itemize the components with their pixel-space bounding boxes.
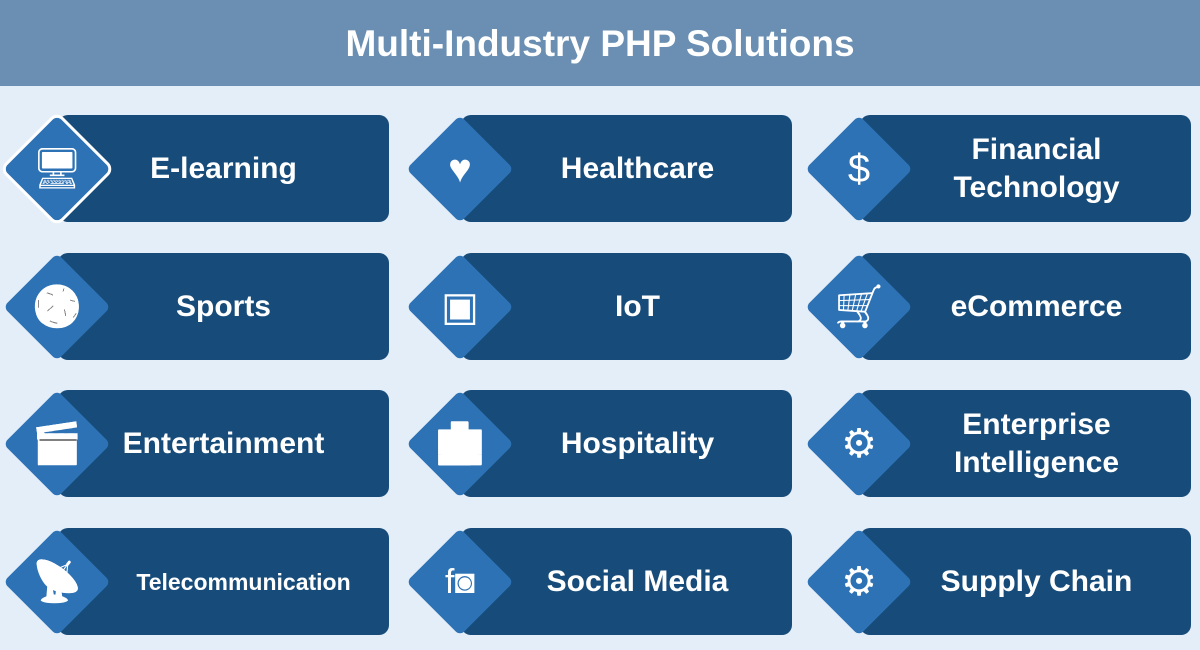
panel: Healthcare	[408, 115, 792, 222]
panel: Supply Chain: Supply Chain	[941, 564, 1132, 598]
panel: Telecommunication: Telecommunication	[136, 568, 351, 594]
panel: Hospitality: Hospitality	[561, 426, 714, 460]
panel: Entertainment: Entertainment	[123, 426, 324, 460]
panel: Entertainment	[6, 390, 389, 497]
icon: head gear: ⚙	[841, 422, 877, 466]
panel: Social Media	[408, 528, 792, 635]
panel: Financial Technology	[808, 115, 1191, 222]
panel: eCommerce	[808, 253, 1191, 360]
panel: Social Media: Social Media	[547, 564, 728, 598]
icon: supply: ⚙	[841, 560, 877, 604]
icon: social: f◙	[445, 563, 475, 601]
panel: E-learning	[2, 114, 389, 224]
panel: IoT: IoT	[615, 290, 660, 322]
panel: Sports	[6, 253, 389, 360]
icon: clapper: 🎬	[32, 422, 82, 466]
icon: heart hands: ♥	[448, 147, 472, 191]
title: Multi-Industry PHP Solutions	[345, 23, 855, 64]
icon: hospital: 🏥	[435, 422, 485, 466]
panel: Telecommunication	[6, 528, 389, 635]
panel: Sports: Sports	[176, 290, 271, 322]
panel: E-learning: E-learning	[150, 152, 297, 184]
panel: Supply Chain	[808, 528, 1191, 635]
panel: Enterprise Intelligence: Intelligence	[954, 446, 1119, 478]
panel: Hospitality	[408, 390, 792, 497]
icon: ball: ⚽	[32, 285, 82, 329]
panel: Enterprise Intelligence	[808, 390, 1191, 497]
icon: network dollar: $	[848, 147, 870, 191]
panel: Healthcare: Healthcare	[561, 152, 714, 184]
icon: cart screen: 🛒	[834, 285, 884, 329]
panel: eCommerce: eCommerce	[951, 290, 1122, 322]
title	[0, 0, 1200, 86]
panel: Financial Technology: Financial	[971, 132, 1102, 166]
icon: tablet: ▣	[441, 285, 479, 329]
panel: IoT	[408, 253, 792, 360]
panel: Enterprise Intelligence: Enterprise	[962, 408, 1111, 440]
icon: monitor: 🖥	[32, 147, 82, 191]
panel: Financial Technology: Technology	[953, 170, 1120, 204]
icon: tower: 📡	[32, 560, 82, 604]
